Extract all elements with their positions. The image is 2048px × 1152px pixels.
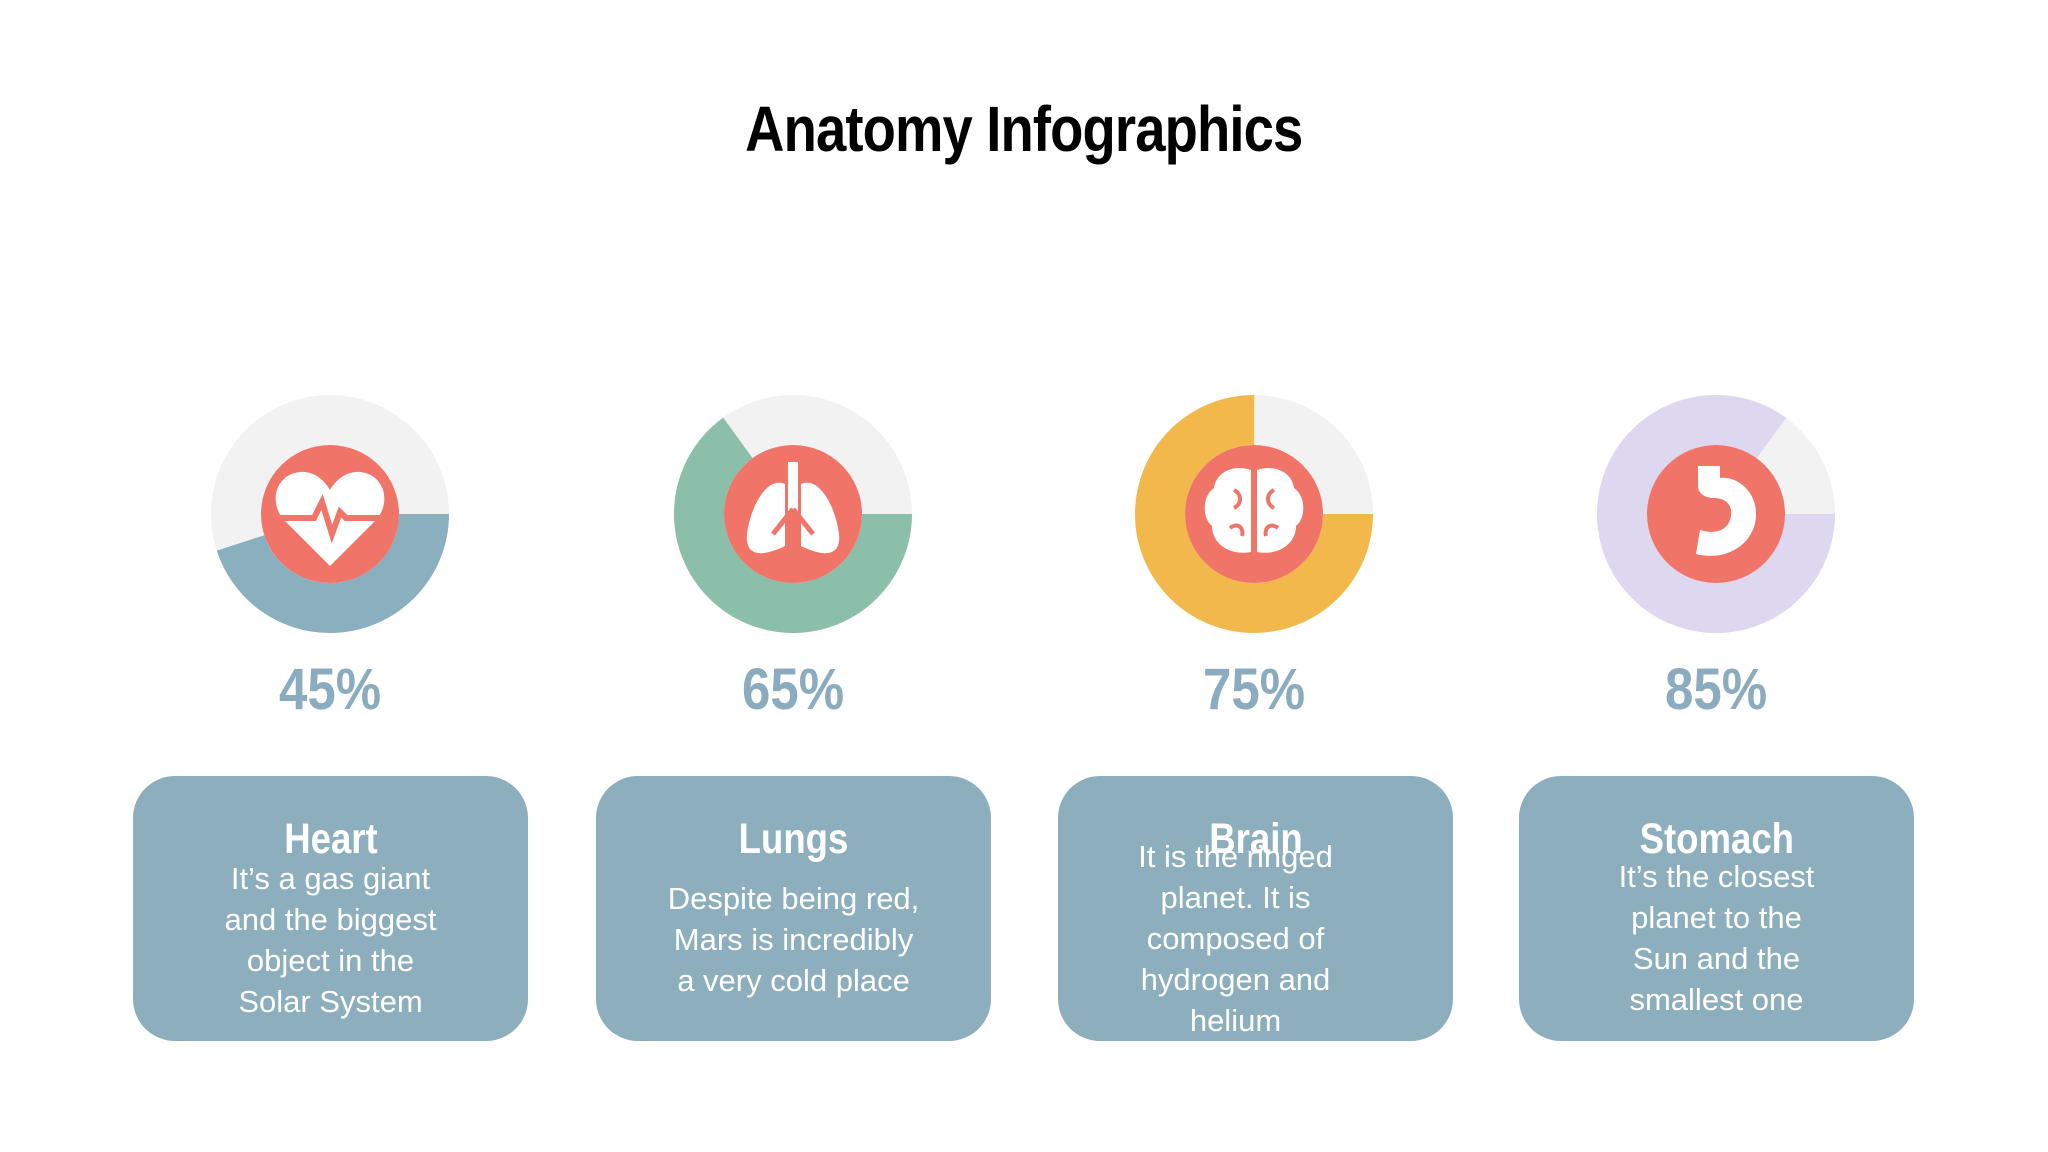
card: lungs bbox=[596, 776, 991, 1041]
donut: stomach 85% bbox=[1597, 395, 1835, 633]
donut: lungs 65% bbox=[674, 395, 912, 633]
icon: brain bbox=[1205, 468, 1303, 553]
card: lungs: a very cold place bbox=[677, 963, 910, 998]
card: stomach: smallest one bbox=[1629, 982, 1804, 1017]
card: lungs: Mars is incredibly bbox=[674, 922, 913, 957]
card: brain: helium bbox=[1190, 1003, 1281, 1038]
card: stomach: Stomach bbox=[1639, 815, 1794, 863]
card: heart: object in the bbox=[247, 943, 414, 978]
title: Anatomy Infographics bbox=[745, 93, 1303, 165]
card: stomach: planet to the bbox=[1631, 900, 1802, 935]
donut: heart 45% bbox=[211, 395, 449, 633]
card: heart: and the biggest bbox=[224, 902, 436, 937]
card: heart: It’s a gas giant bbox=[231, 861, 430, 896]
card: heart: Solar System bbox=[238, 984, 423, 1019]
percentage: 85%: 85% bbox=[1665, 657, 1767, 722]
card: brain: Brain bbox=[1209, 815, 1302, 863]
donut: brain 75% bbox=[1135, 395, 1373, 633]
percentage: 45%: 45% bbox=[279, 657, 381, 722]
card: brain: planet. It is bbox=[1161, 880, 1310, 915]
card: brain: It is the ringed bbox=[1138, 839, 1333, 874]
card: heart bbox=[133, 776, 528, 1041]
card: brain: hydrogen and bbox=[1141, 962, 1330, 997]
icon: lungs bbox=[747, 462, 839, 553]
card: heart: Heart bbox=[284, 815, 377, 863]
card: lungs: Despite being red, bbox=[668, 881, 919, 916]
card: stomach: Sun and the bbox=[1633, 941, 1800, 976]
icon: heart bbox=[276, 472, 384, 566]
percentage: 75%: 75% bbox=[1203, 657, 1305, 722]
percentage: 65%: 65% bbox=[742, 657, 844, 722]
card: brain bbox=[1058, 776, 1453, 1041]
icon: stomach bbox=[1696, 466, 1756, 556]
card: stomach: It’s the closest bbox=[1619, 859, 1814, 894]
card: brain: composed of bbox=[1147, 921, 1324, 956]
card: stomach bbox=[1519, 776, 1914, 1041]
card: lungs: Lungs bbox=[739, 815, 848, 863]
